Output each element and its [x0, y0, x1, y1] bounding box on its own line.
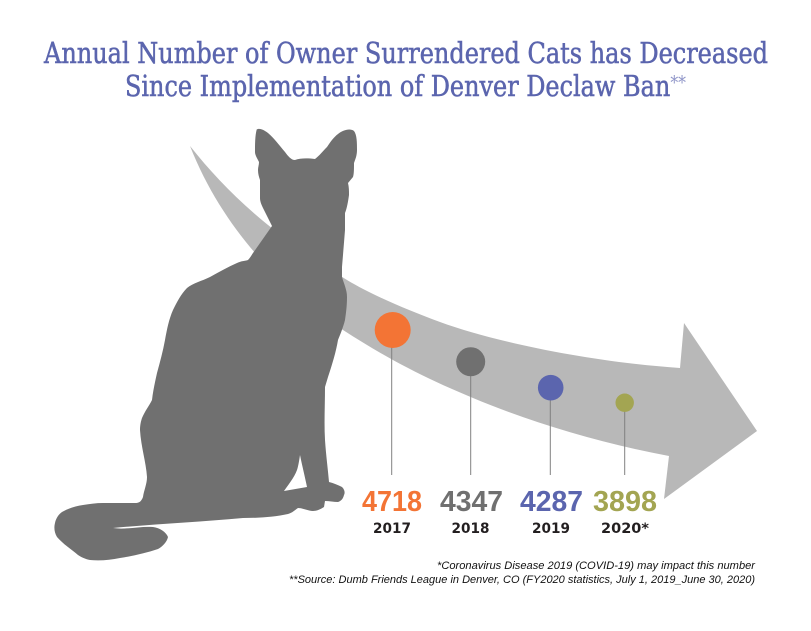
data point: 2018: [440, 347, 503, 537]
data point: 2020: [593, 394, 657, 537]
data point: 2019: 2019: [532, 521, 570, 537]
title: **: [670, 72, 686, 94]
data point: 2019: [520, 375, 583, 537]
data point: 2017: [362, 312, 422, 537]
data point: 2020: 2020*: [601, 521, 650, 537]
data point: 2018: 4347: [440, 486, 503, 518]
data point: 2017: 4718: [362, 486, 422, 518]
data point: 2019: 4287: [520, 486, 583, 518]
footnotes: [289, 560, 756, 586]
title: [43, 36, 768, 103]
title: Annual Number of Owner Surrendered Cats has Decreased: [43, 36, 768, 70]
chart: yearly data points: [362, 312, 657, 537]
title: Since Implementation of Denver Declaw Ban: [125, 69, 719, 103]
arrow: downward trend: [190, 146, 757, 499]
data point: 2020: 3898: [593, 486, 657, 518]
icon: cat silhouette: [54, 129, 357, 560]
footnotes: *Coronavirus Disease 2019 (COVID-19) may impact this number: [437, 560, 756, 572]
footnotes: **Source: Dumb Friends League in Denver, CO (FY2020 statistics, July 1, 2019_June 30, 2020): [289, 574, 755, 586]
data point: 2018: 2018: [452, 521, 490, 537]
data point: 2017: 2017: [373, 521, 411, 537]
